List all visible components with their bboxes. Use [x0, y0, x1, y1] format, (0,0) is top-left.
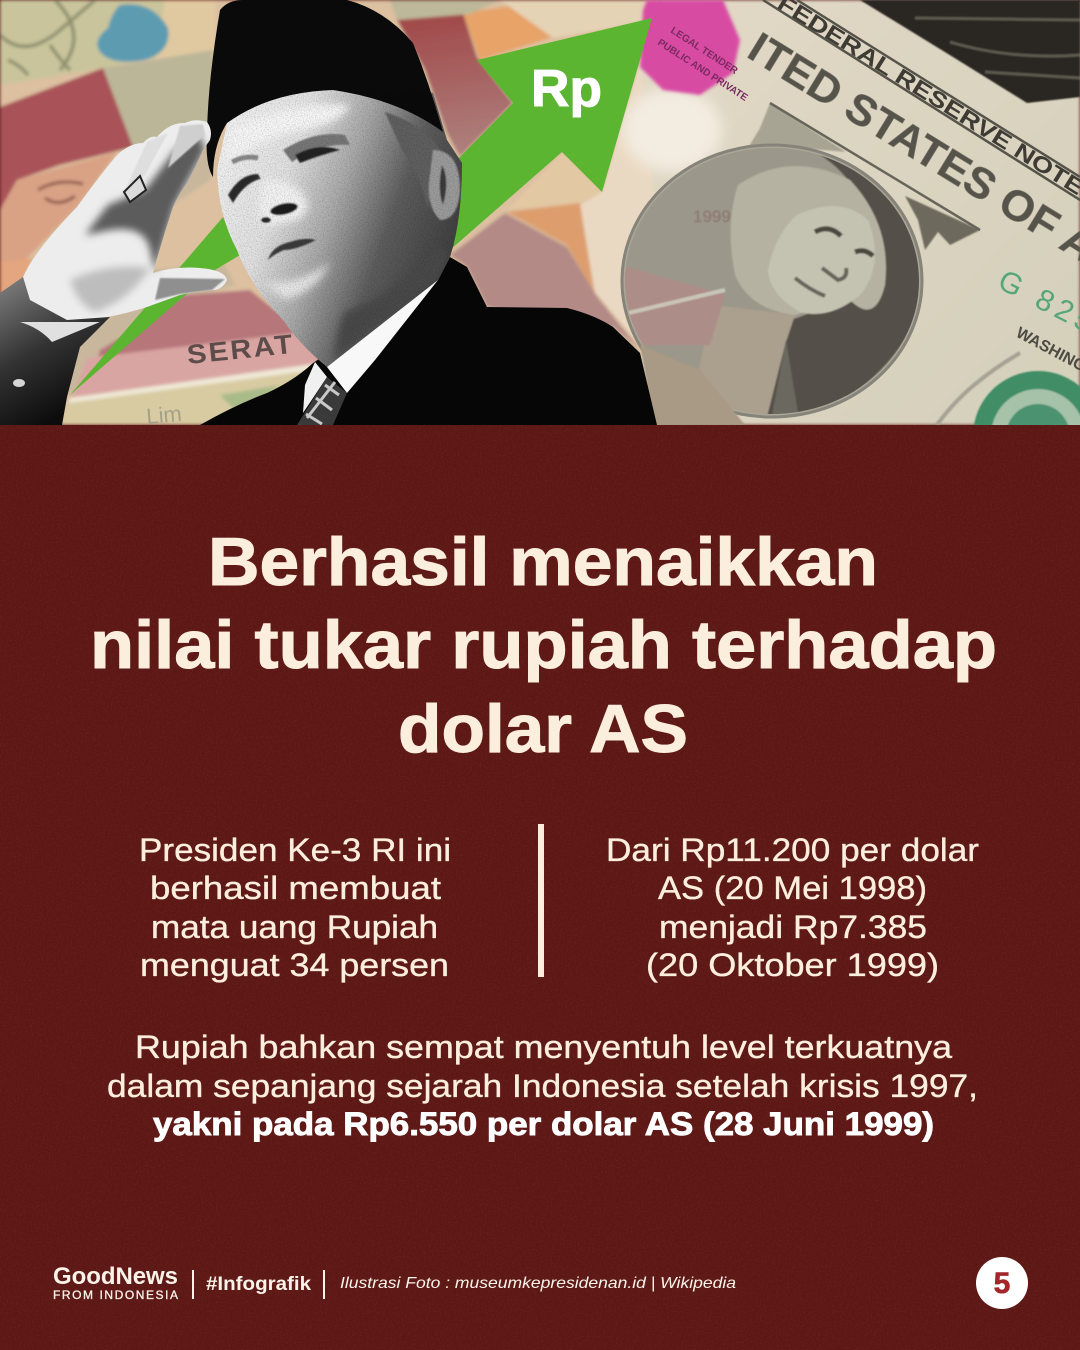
photo credit: Ilustrasi Foto : museumkepresidenan.id | Wikipedia [340, 1275, 736, 1292]
eyes and brows [283, 134, 350, 162]
arrow underside notes [579, 62, 654, 342]
halftone grain on photo [210, 90, 470, 380]
palm shadow [85, 135, 205, 272]
mouth [268, 239, 316, 260]
white shirt collar [303, 280, 438, 413]
lower note [98, 288, 318, 360]
hashtag: #Infografik [206, 1274, 311, 1295]
footer credits [53, 1263, 736, 1302]
arrow label Rp: Rp [531, 60, 602, 118]
GoodNews logo [53, 1263, 178, 1302]
text block: right column: (20 Oktober 1999) [646, 947, 939, 983]
forehead highlight [225, 104, 350, 165]
red note with portrait [0, 68, 133, 210]
portrait of president saluting [0, 0, 657, 425]
US dollar bill [618, 0, 1080, 425]
text block: left column: menguat 34 persen [140, 947, 449, 983]
rupiah banknotes background [0, 0, 670, 425]
text block: left column: berhasil membuat [150, 870, 441, 906]
maroon text panel [0, 425, 1080, 1350]
treasury seal [936, 351, 1080, 425]
banknote lettering: Lim [145, 401, 183, 429]
text block: closing paragraph: yakni pada Rp6.550 per dolar AS (28 Juni 1999) [153, 1106, 934, 1142]
neck shadow [335, 245, 450, 360]
maroon note behind arrow [397, 13, 513, 157]
suit jacket [200, 257, 657, 425]
text block: closing paragraph: dalam sepanjang sejarah Indonesia setelah krisis 1997, [107, 1068, 978, 1104]
portrait hair [731, 166, 886, 315]
photo collage banner [0, 0, 1080, 425]
text block: right column: menjadi Rp7.385 [659, 909, 927, 945]
green upward arrow [70, 18, 652, 395]
oval portrait of Washington [620, 103, 980, 430]
text block: left column: mata uang Rupiah [151, 909, 438, 945]
page number badge: 5 [994, 1267, 1010, 1300]
saluting hand [23, 120, 227, 321]
portrait face [768, 206, 875, 314]
nose [259, 180, 308, 225]
head and face [217, 86, 462, 367]
title: Berhasil menaikkan [208, 524, 878, 600]
coat and jabot [699, 306, 794, 414]
text block: right column: Dari Rp11.200 per dolar [606, 832, 979, 868]
light glow on bill [622, 88, 722, 172]
banknote lettering: SERAT [185, 329, 296, 370]
text block: right column: AS (20 Mei 1998) [658, 870, 927, 906]
text block: left column [139, 832, 451, 983]
ring [124, 176, 146, 202]
bill inscriptions: PUBLIC AND PRIVATE [655, 37, 750, 104]
text block: right column [606, 832, 979, 983]
bill inscriptions: LEGAL TENDER [668, 25, 740, 77]
patterned necktie [297, 377, 347, 425]
title: dolar AS [398, 691, 688, 767]
text block: left column: Presiden Ke-3 RI ini [139, 832, 451, 868]
frame spandrels [749, 103, 846, 152]
title: nilai tukar rupiah terhadap [90, 607, 997, 683]
GoodNews logo: FROM INDONESIA [53, 1288, 178, 1302]
text block: closing paragraph [107, 1029, 978, 1142]
black peci hat [207, 0, 443, 177]
GoodNews logo: GoodNews [53, 1263, 178, 1290]
hair and ear [385, 112, 440, 210]
banknote lettering [148, 334, 292, 424]
oval portrait of Washington: 1999 [693, 207, 731, 226]
dark table corner [860, 0, 1080, 103]
facial features [225, 104, 460, 360]
jacket sleeve [0, 277, 110, 425]
pink seal stamp [640, 0, 740, 95]
bill inscriptions [655, 0, 1080, 391]
bottom-left engraved ornament [640, 345, 745, 425]
title [90, 524, 997, 767]
page number badge [976, 1257, 1028, 1309]
text block: closing paragraph: Rupiah bahkan sempat menyentuh level terkuatnya [135, 1029, 952, 1065]
